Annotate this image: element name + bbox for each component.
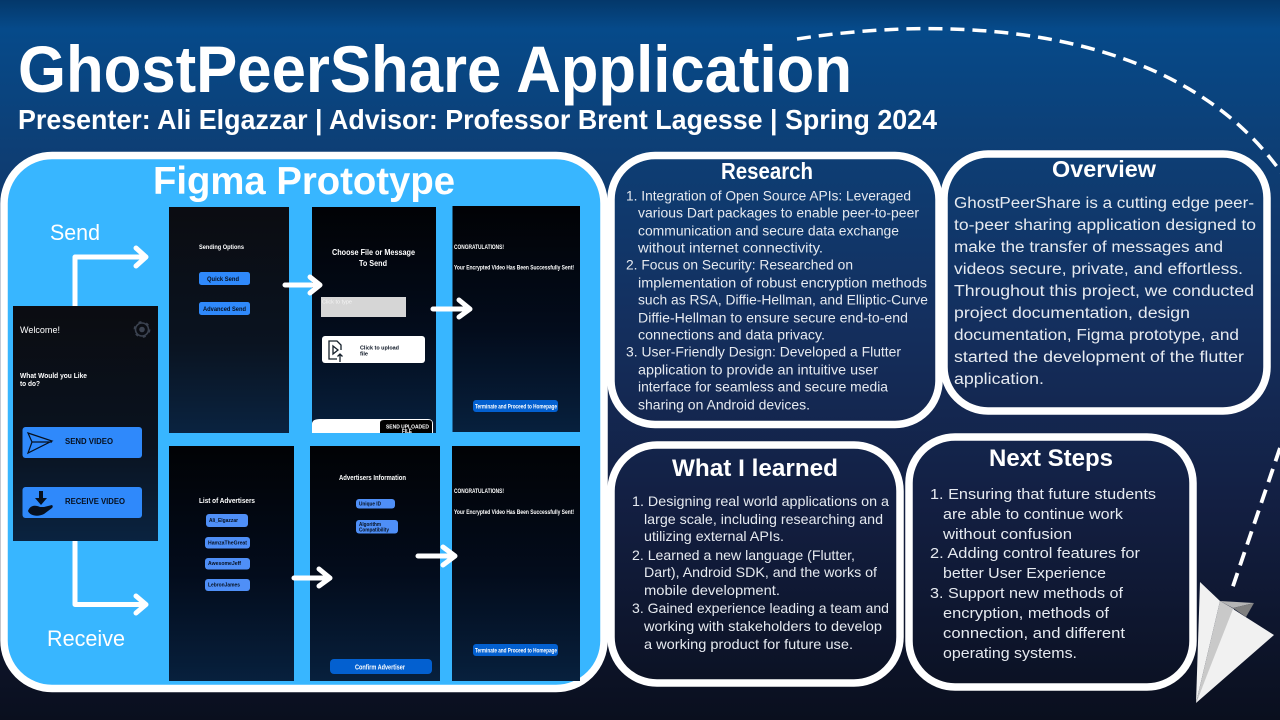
button: send video [22,427,142,458]
screen: sending options: Quick Send [207,276,239,283]
screen: choose file or message: SEND UPLOADED [386,424,429,430]
text block: lessons list [632,494,889,652]
text block: next steps list: without confusion [942,526,1072,543]
screen: advertisers information: Advertisers Information [339,475,406,482]
text block: overview description: documentation, Figma prototype, and [954,327,1239,344]
screen: advertisers information: Compatibility [359,528,389,534]
text block: lessons list: utilizing external APIs. [644,529,784,544]
screen: choose file or message: file [360,352,369,358]
text block: lessons list: large scale, including researching and [644,512,883,527]
text block: overview description: to-peer sharing application designed to [954,217,1256,234]
screen: home [13,306,158,541]
text block: lessons list: a working product for future use. [644,637,853,652]
panel: next steps [909,437,1193,687]
label: Receive: Receive [47,626,125,651]
text block: next steps list: are able to continue work [943,506,1124,523]
arrow: home to send options [75,248,146,306]
screen: choose file or message: Click to upload [360,346,399,352]
text block: lessons list: 1. Designing real world applications on a [632,494,889,509]
arrow: advertiser list to information [294,569,330,586]
text block: next steps list: encryption, methods of [943,605,1110,622]
arrow: file choice to confirmation [433,300,470,317]
text block: research list: 1. Integration of Open Source APIs: Leveraged [626,188,911,204]
arrow: send options to file choice [285,277,320,293]
text block: research list: without internet connectivity. [637,240,823,256]
screen: home: What Would you Like [20,371,87,380]
text block: next steps list [930,486,1156,662]
button: receive video: RECEIVE VIDEO [65,497,125,506]
panel: what I learned [611,445,900,683]
text block: overview description [954,195,1256,388]
screen: choose file or message: FILE [402,429,412,435]
subtitle: presenter and advisor: Presenter: Ali Elgazzar | Advisor: Professor Brent Lagesse | Spring 2024 [18,104,938,135]
screen: list of advertisers: List of Advertisers [199,498,255,505]
screen: sending options: Sending Options [199,244,244,251]
panel: research [611,156,939,424]
text block: research list: communication and secure data exchange [638,224,899,238]
text block: research list: 2. Focus on Security: Researched on [626,258,853,272]
screen: advertisers information: Algorithm [359,522,381,528]
screen: receive confirmation [452,446,580,681]
screen: choose file or message: To Send [359,258,387,268]
arrow: home to advertiser list [75,541,146,613]
text block: lessons list: Dart), Android SDK, and the works of [644,565,877,580]
screen: choose file or message: Click to type [322,300,352,306]
text block: next steps list: 3. Support new methods of [930,585,1124,602]
text block: research list: interface for seamless and secure media [638,380,888,394]
screen: choose file or message [312,207,436,435]
heading: Overview: Overview [1052,156,1156,182]
screen: home: to do? [20,379,40,388]
button: receive video [22,487,142,518]
text block: overview description: make the transfer of messages and [954,239,1223,256]
screen: send confirmation: Terminate and Proceed to Homepage [475,404,558,410]
text block: research list: 3. User-Friendly Design: Developed a Flutter [626,344,901,360]
text block: next steps list: connection, and different [943,625,1126,642]
dashed flight path: upper curve [797,29,1280,178]
text block: research list: sharing on Android devices. [638,398,810,412]
text block: research list: such as RSA, Diffie-Hellman, and Elliptic-Curve [638,292,928,308]
text block: research list: implementation of robust encryption methods [638,276,927,290]
text block: research list: various Dart packages to enable peer-to-peer [638,206,919,220]
screen: list of advertisers: AwesomeJeff [208,561,241,567]
screen: receive confirmation: Your Encrypted Video Has Been Successfully Sent! [454,510,574,516]
heading: Figma Prototype: Figma Prototype [153,160,455,203]
text block: research list: Diffie-Hellman to ensure secure end-to-end [638,310,908,326]
text block: lessons list: 3. Gained experience leading a team and [632,601,889,616]
text block: overview description: started the development of the flutter [954,349,1244,366]
text block: next steps list: 1. Ensuring that future students [930,486,1156,503]
icon: upload video file [329,341,342,362]
text block: overview description: project documentation, design [954,305,1190,322]
screen: advertisers information: Confirm Advertiser [355,662,405,672]
screen: list of advertisers: Ali_Elgazzar [209,518,239,524]
heading: What I learned: What I learned [672,455,838,482]
text block: lessons list: 2. Learned a new language (Flutter, [632,548,855,563]
screen: send confirmation [452,206,580,432]
text block: lessons list: mobile development. [644,583,780,598]
heading: Next Steps: Next Steps [989,445,1113,472]
screen: list of advertisers: LebronJames [208,582,240,588]
screen: advertisers information: Unique ID [359,502,381,508]
screen: send confirmation: CONGRATULATIONS! [454,245,504,251]
text block: research list [626,188,928,412]
panel: Figma prototype [4,156,604,688]
heading: Research: Research [721,158,813,184]
text block: research list: connections and data privacy. [638,328,825,342]
screen: receive confirmation: Terminate and Proceed to Homepage [475,648,558,654]
text block: next steps list: 2. Adding control features for [930,545,1140,562]
screen: choose file or message: Choose File or Message [332,247,415,257]
screen: send confirmation: Your Encrypted Video Has Been Successfully Sent! [454,266,574,272]
screen: sending options: Advanced Send [203,306,246,313]
icon: paper plane [1196,582,1274,703]
text block: overview description: Throughout this project, we conducted [954,283,1254,300]
text block: next steps list: operating systems. [943,645,1077,662]
text block: overview description: videos secure, private, and effortless. [954,261,1243,278]
text block: research list: application to provide an intuitive user [638,362,878,378]
screen: receive confirmation: CONGRATULATIONS! [454,489,504,495]
title: GhostPeerShare Application [18,32,852,106]
arrow: information to confirmation [418,547,455,565]
text block: lessons list: working with stakeholders to develop [643,619,882,634]
screen: home: Welcome! [20,325,60,336]
screen: list of advertisers [169,446,294,681]
text block: overview description: GhostPeerShare is a cutting edge peer- [954,195,1254,212]
label: Send: Send [50,220,100,245]
dashed flight path: lower segment [1231,448,1280,592]
icon: settings gear [134,322,150,337]
text block: overview description: application. [954,371,1044,388]
panel: overview [944,154,1267,411]
screen: advertisers information [310,446,440,681]
screen: list of advertisers: HamzaTheGreat [208,540,247,546]
screen: sending options [169,207,289,433]
button: send video: SEND VIDEO [65,437,113,446]
text block: next steps list: better User Experience [943,565,1106,582]
